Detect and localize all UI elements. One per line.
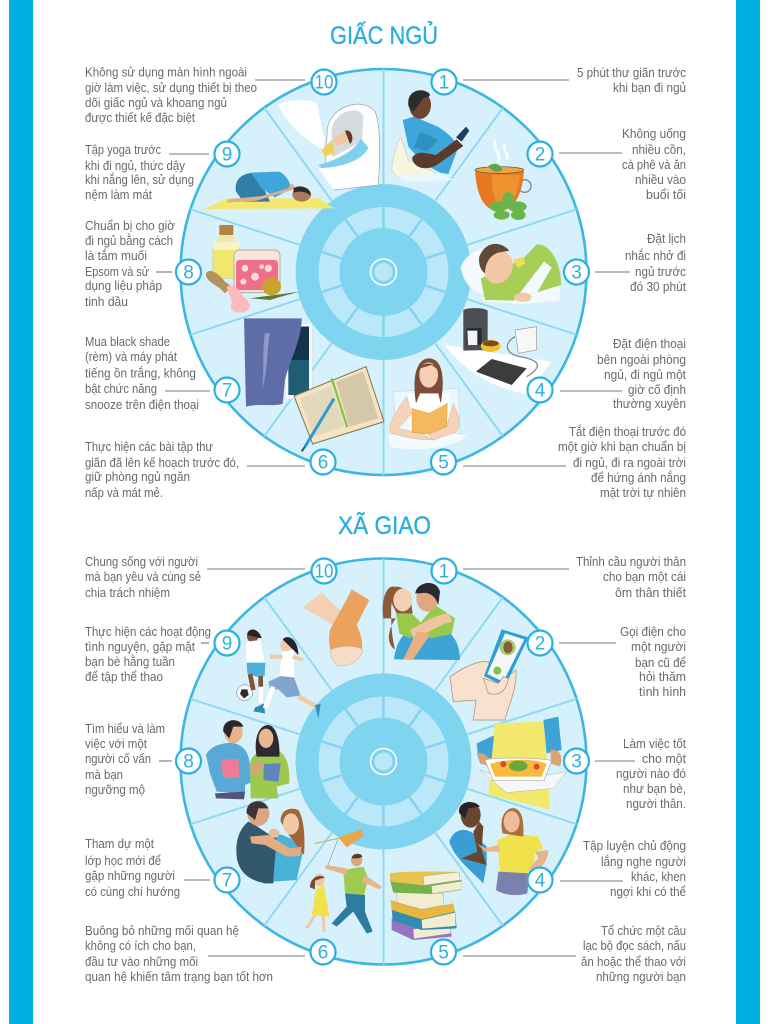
number badges: social wheel: 5 [438,942,449,964]
callout 2: no alcohol: Không uống [622,126,686,141]
callout 7: new class: Tham dự một [85,836,154,851]
wheel: social base [180,558,586,964]
number badges: social wheel: 6 [318,942,328,964]
callout 9: volunteer: Thực hiện các hoạt động [85,624,211,639]
number badges: social wheel: 1 [439,562,449,582]
callout 7: new class: gặp những người [85,868,175,883]
callout 8: mentor: việc với một [85,736,147,751]
icon: coffee machine, phone charging [445,308,552,394]
callout 1: relax 5 minutes [463,65,686,95]
callout 8: bath: Epsom và sử [85,264,149,279]
icon: bath salts and oil [206,225,300,313]
callout 6: relaxation: giãn đã lên kế hoạch trước đó, [85,455,239,470]
callout 5: sunlight: để hứng ánh nắng [591,470,686,485]
number badges: sleep wheel: 4 [535,380,546,402]
callout 9: volunteer: tình nguyện, gặp mặt [85,639,195,654]
title: XÃ GIAO: XÃ GIAO [338,511,431,540]
callout 8: bath: dụng liệu pháp [85,278,162,293]
icon: curtain and night window [244,318,312,407]
callout 4: phone outside: bên ngoài phòng [597,352,686,367]
callout 2: call old friend: hỏi thăm [639,669,686,684]
left side bar [9,0,33,1024]
callout 8: bath: đi ngủ bằng cách [85,233,173,248]
callout 9: volunteer [85,624,211,684]
callout 10: live with loved one: Chung sống với người [85,554,198,569]
callout 4: phone outside: Đặt điện thoại [613,336,686,351]
callout 10: no screens [85,64,305,125]
callout 5: book club: lạc bộ đọc sách, nấu [583,938,686,953]
icon: runners and football [237,629,321,718]
number badges: sleep wheel: 1 [439,72,449,94]
callout 10: live with loved one [85,554,305,600]
icon: dancing couple [236,801,304,883]
callout 3: do good [595,736,686,811]
number badges: sleep wheel: 10 [314,72,334,94]
callout 6: let go of bad relationships: không có ích cho bạn, [85,938,196,953]
callout 2: call old friend: một người [631,639,686,654]
callout 4: active listening: lắng nghe người [601,854,686,869]
callout 5: book club: ăn hoặc thể thao với [581,954,686,969]
callout 7: black shade: bật chức năng [85,381,157,396]
callout 2: call old friend: bạn cũ để [635,655,686,670]
wheel: sleep base [180,69,586,475]
callout 2: call old friend: tình hình [639,684,686,699]
callout 2: no alcohol [559,126,686,202]
callout 3: do good: người nào đó [616,766,686,781]
callout 5: sunlight: một giờ khi bạn chuẩn bị [558,439,686,454]
callout 1: hug [463,554,686,600]
callout 5: sunlight [463,424,686,500]
callout 9: volunteer: để tập thể thao [85,669,163,684]
callout 10: live with loved one: mà bạn yêu và cùng sẻ [85,569,201,584]
callout 2: no alcohol: cà phê và ăn [622,157,686,172]
callout 8: mentor [85,721,172,797]
callout 9: yoga: nệm làm mát [85,187,152,202]
callout 1: relax 5 minutes: 5 phút thư giãn trước [577,65,686,80]
callout 4: active listening [560,838,686,899]
icon: man and woman talking [449,802,548,895]
callout 3: reminder: nhắc nhở đi [625,248,686,263]
number badges: sleep wheel: 9 [222,144,232,166]
icon: father and child with kite [307,829,382,933]
callout 9: yoga: khi đi ngủ, thức dậy [85,158,185,173]
callout 1: hug: ôm thân thiết [615,585,686,600]
icon: man reading in bed [392,90,469,182]
callout 2: call old friend [559,624,686,699]
callout 5: sunlight: đi ngủ, đi ra ngoài trời [573,455,686,470]
number badges: social wheel: 2 [535,634,545,654]
icon: holding hands [303,589,369,666]
callout 6: let go of bad relationships: đầu tư vào những mối [85,954,198,969]
callout 2: call old friend: Gọi điện cho [620,624,686,639]
callout 10: no screens: giờ làm việc, sử dụng thiết bị theo [85,80,257,95]
callout 4: phone outside: giờ cố định [628,382,686,397]
icon: open notebook and pen [294,367,384,451]
callout 6: relaxation: nấp và mát mẻ. [85,485,163,500]
callout 8: mentor: mà bạn [85,767,123,782]
icon: apron and baked dish [477,717,567,809]
callout 4: active listening: khác, khen [631,869,686,884]
number badges: sleep wheel: 6 [318,452,328,474]
number badges: social wheel: 9 [222,634,232,654]
callout 10: no screens: Không sử dụng màn hình ngoài [85,64,247,80]
right side bar [736,0,760,1024]
callout 9: volunteer: bạn bè hằng tuần [85,654,175,669]
callout 5: book club [463,923,686,984]
number badges: social wheel: 4 [535,870,546,892]
callout 7: black shade: (rèm) và máy phát [85,349,177,364]
title: GIẤC NGỦ: GIẤC NGỦ [330,20,438,50]
callout 3: do good: cho một [642,751,686,766]
number badges: sleep wheel: 3 [571,262,582,284]
icon: sleep pod [278,100,380,190]
number badges: social wheel [176,558,589,964]
callout 5: book club: Tổ chức một câu [601,923,686,938]
icon: hand holding phone [450,629,528,720]
number badges: sleep wheel [176,70,589,474]
callout 8: mentor: Tìm hiểu và làm [85,721,165,736]
icon: cup of tea with mint [475,140,531,220]
callout 2: no alcohol: nhiều vào [635,172,686,187]
callout 3: reminder: đó 30 phút [630,279,686,294]
callout 6: relaxation: Thực hiện các bài tập thư [85,439,213,454]
icon: yoga child pose [203,172,334,209]
number badges: social wheel: 3 [571,752,582,772]
callout 6: let go of bad relationships: quan hệ khiến tâm trạng bạn tốt hơn [85,969,273,984]
callout 6: let go of bad relationships [85,923,305,984]
number badges: sleep wheel: 5 [438,452,449,474]
callout 8: bath: Chuẩn bị cho giờ [85,218,175,233]
callout 3: reminder: Đặt lịch [647,231,686,246]
callout 8: mentor: ngưỡng mộ [85,782,145,797]
callout 3: do good: như bạn bè, [623,781,686,796]
number badges: social wheel: 10 [314,562,334,582]
callout 6: relaxation [85,439,305,500]
callout 8: bath: tinh dầu [85,294,128,309]
callout 10: no screens: được thiết kế đặc biệt [85,110,195,125]
number badges: sleep wheel: 2 [535,144,545,166]
callout 4: active listening: Tập luyện chủ động [583,838,686,853]
number badges: social wheel: 7 [222,870,232,892]
callout 1: hug: Thỉnh cầu người thân [576,554,686,569]
callout 9: yoga: Tập yoga trước [85,142,161,157]
callout 5: book club: những người bạn [596,969,686,984]
callout 8: mentor: người cố vấn [85,751,151,766]
callout 6: relaxation: giữ phòng ngủ ngăn [85,469,190,484]
icon: woman reading a book [388,358,467,449]
callout 1: relax 5 minutes: khi bạn đi ngủ [613,80,686,95]
callout 7: black shade: tiếng ồn trắng, không [85,366,196,380]
callout 4: active listening: ngợi khi có thể [610,884,686,899]
callout 9: yoga: khi nắng lên, sử dụng [85,172,194,187]
callout 1: hug: cho bạn một cái [603,569,686,584]
number badges: social wheel: 8 [183,752,194,772]
callout 10: live with loved one: chia trách nhiệm [85,585,170,600]
icon: man sleeping [461,244,561,304]
callout 7: new class: có cùng chí hướng [85,884,180,899]
illustrations: social wheel [206,583,567,940]
callout 6: let go of bad relationships: Buông bỏ những mối quan hệ [85,923,239,938]
callout 7: new class: lớp học mới để [85,853,161,868]
number badges: sleep wheel: 8 [183,262,194,284]
callout 5: sunlight: mặt trời tự nhiên [600,485,686,500]
number badges: sleep wheel: 7 [222,380,232,402]
callout 7: black shade: snooze trên điện thoại [85,397,199,412]
icon: couple hugging [383,583,460,660]
callout 8: bath: là tắm muối [85,248,147,263]
callout 7: black shade: Mua black shade [85,334,170,349]
callout 2: no alcohol: nhiều cồn, [632,142,686,157]
illustrations: sleep wheel [203,90,561,451]
callout 3: do good: người thân. [626,796,686,811]
callout 4: phone outside [560,336,686,411]
callout 7: black shade [85,334,210,412]
callout 4: phone outside: ngủ, đi ngủ một [604,367,686,382]
callout 2: no alcohol: buổi tối [646,187,686,202]
callout 4: phone outside: thường xuyên [613,396,686,411]
callout 8: bath [85,218,175,309]
callout 5: sunlight: Tắt điện thoại trước đó [569,424,686,439]
callout 3: reminder [595,231,686,294]
callout 3: reminder: ngủ trước [635,264,686,279]
callout 10: no screens: dõi giấc ngủ và khoang ngủ [85,95,227,110]
icon: stack of books [390,872,462,940]
callout 9: yoga [85,142,209,202]
callout 7: new class [85,836,210,899]
icon: mentor couple with books [206,720,289,799]
callout 3: do good: Làm việc tốt [623,736,686,751]
